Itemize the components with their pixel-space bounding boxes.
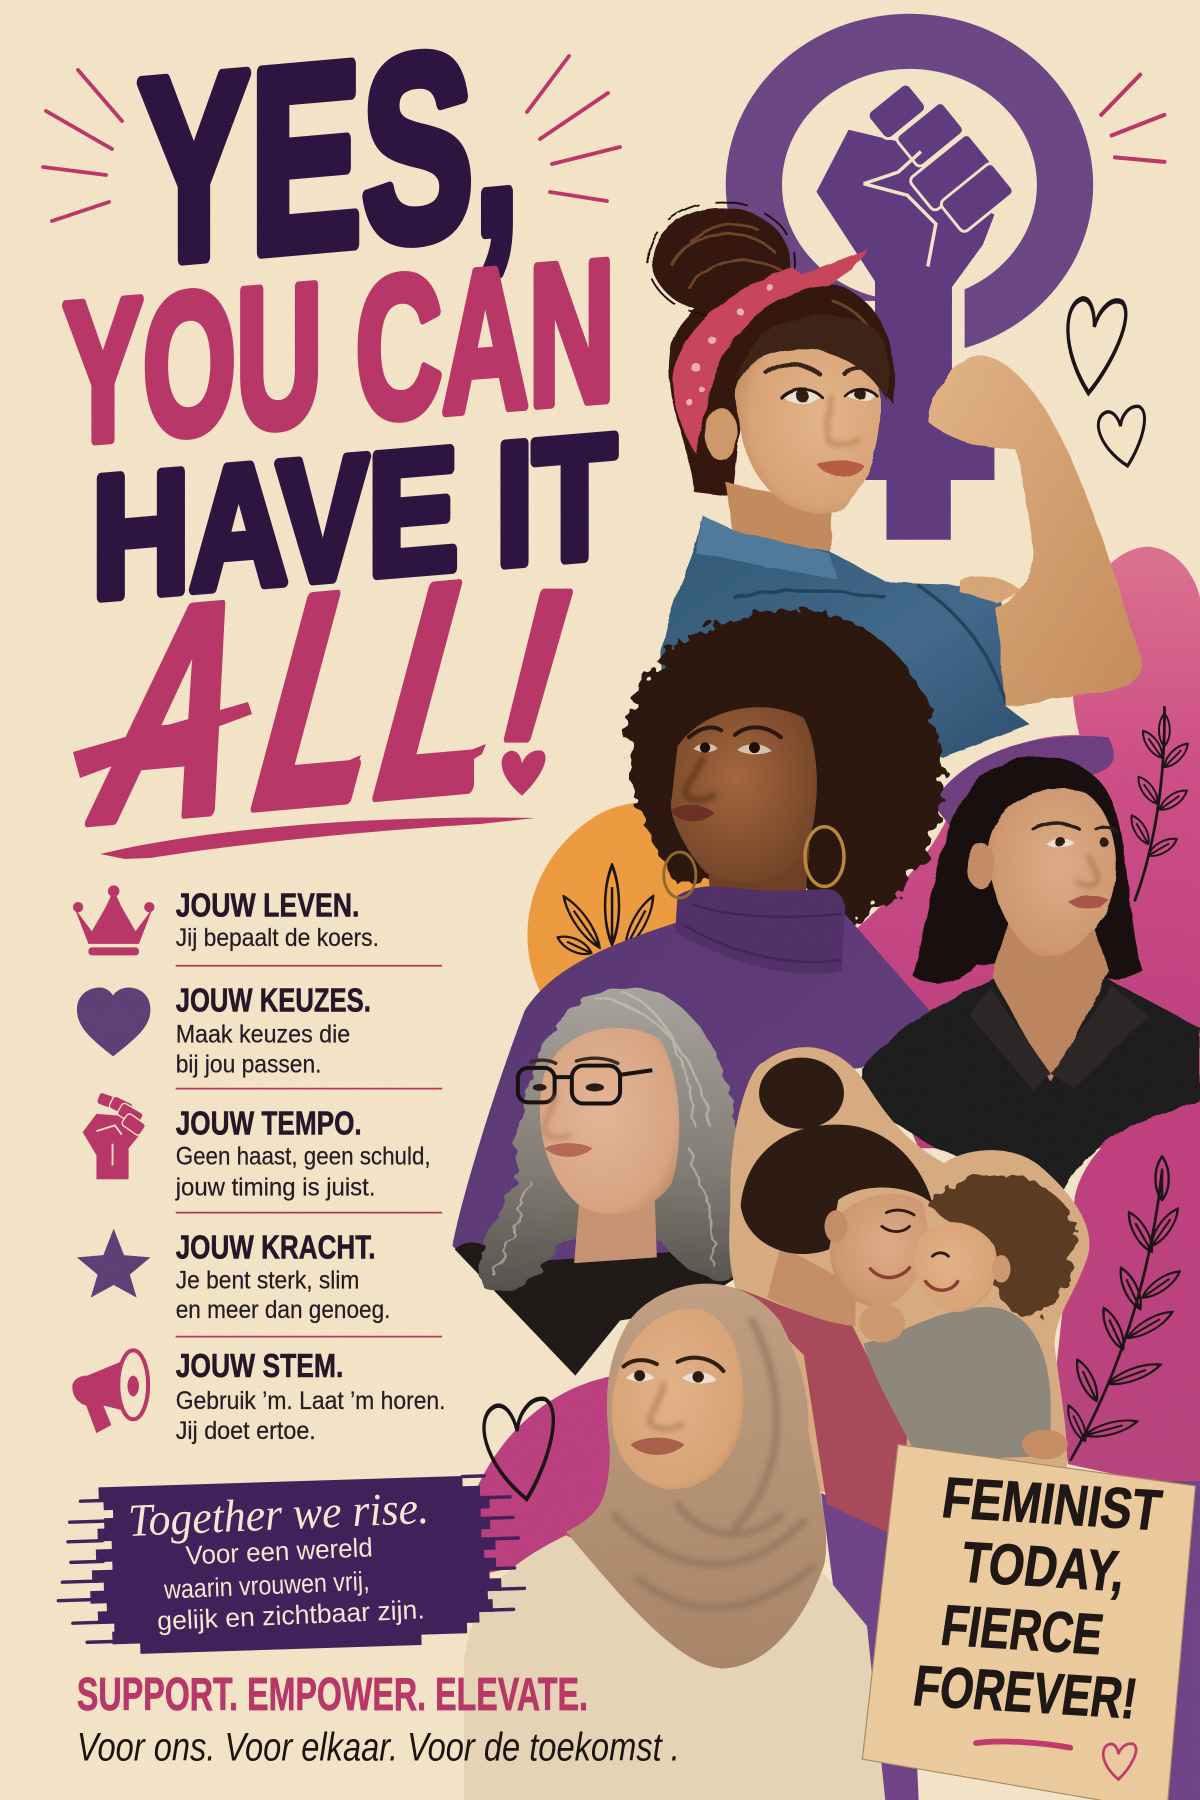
title line: HAVE IT: HAVE IT [92, 398, 616, 635]
panel text two: waarin vrouwen vrij, [163, 1566, 370, 1605]
description line two: bij jou passen. [176, 1051, 322, 1079]
row: jouw keuzes [77, 983, 371, 1079]
pink stroke on sign [976, 1742, 1070, 1748]
protest sign [862, 1445, 1195, 1800]
description line two: jouw timing is juist. [175, 1173, 375, 1201]
black shirt [861, 976, 1200, 1194]
heading: JOUW KEUZES. [176, 983, 371, 1020]
neck [574, 1194, 657, 1263]
brush underline [100, 817, 535, 859]
sign board [862, 1445, 1195, 1800]
icon: heart [77, 988, 150, 1056]
black top [455, 1242, 741, 1376]
purple patch bottom centre [821, 1493, 919, 1800]
face [612, 1308, 744, 1490]
facial features [767, 365, 878, 476]
child's curly hair [928, 1177, 1075, 1318]
pink blob right [833, 547, 1200, 1148]
patch over exclamation dot [474, 750, 526, 810]
turtleneck collar [675, 886, 845, 974]
row: jouw tempo [83, 1092, 431, 1201]
title sparks [43, 56, 620, 221]
title line: ALL: ! [453, 529, 604, 864]
person: grey-haired woman with glasses [455, 984, 747, 1376]
hoop earring [805, 827, 844, 886]
denim shirt [661, 516, 1030, 758]
small hoop earring [664, 852, 696, 898]
person: dark-haired woman in black shirt [861, 756, 1200, 1194]
hair and bun [648, 202, 895, 496]
cream sweater [464, 1535, 885, 1800]
person: woman with bandana flexing [648, 202, 1141, 758]
mother's rose sweater [736, 1288, 907, 1539]
facial features [531, 1058, 618, 1157]
doodle: sprig upper right [1127, 706, 1192, 901]
mother's face [830, 1194, 932, 1307]
mother's hair and bun [741, 1058, 932, 1254]
red bandana [673, 249, 868, 454]
child's ear [992, 1255, 1011, 1283]
tan cutout [729, 1047, 1089, 1493]
glasses [518, 1066, 652, 1104]
ear [705, 408, 737, 460]
heading: JOUW KRACHT. [176, 1230, 375, 1267]
mother's neck [767, 1246, 855, 1326]
face [540, 1028, 679, 1214]
pink heart on sign [1103, 1744, 1136, 1779]
icon: crown [73, 885, 154, 955]
child's face [914, 1222, 997, 1312]
mother's ear [824, 1210, 847, 1242]
artwork collage [452, 14, 1200, 1800]
rolled sleeve [735, 586, 1006, 703]
person: mother and child cutout [729, 1047, 1089, 1539]
long grey hair [480, 984, 747, 1294]
shirt collar [696, 516, 838, 580]
purple patch right edge [1160, 1481, 1200, 1800]
panel text: Voor een wereld [185, 1532, 373, 1570]
brush panel: together we rise [55, 1475, 526, 1650]
title line: ALL: ALL [67, 513, 549, 887]
neck [726, 482, 833, 557]
hand behind elbow [959, 576, 1022, 603]
shirt collar [970, 985, 1148, 1091]
doodle: heart lower left [481, 1397, 564, 1504]
doodle: leaves on orange blob [555, 865, 668, 959]
heading: JOUW TEMPO. [176, 1106, 362, 1143]
title line: YOU CAN: YOU CAN [63, 219, 615, 486]
flexed arm [929, 355, 1141, 706]
row: jouw stem [72, 1348, 446, 1445]
sign text [909, 1465, 1165, 1732]
magenta blob lower left [466, 1376, 643, 1573]
ear [967, 843, 994, 889]
icon: fist [83, 1092, 147, 1179]
hands [859, 1303, 905, 1342]
doodle: small heart upper right [1096, 405, 1152, 470]
closing handwritten line: Voor ons. Voor elkaar. Voor de toekomst . [77, 1724, 680, 1769]
icon: star [77, 1229, 150, 1298]
description: Gebruik ’m. Laat ’m horen. [176, 1387, 446, 1415]
purple sweater [452, 913, 942, 1275]
child's grey sweater [864, 1307, 1051, 1461]
icon: megaphone [72, 1350, 148, 1433]
panel text three: gelijk en zichtbaar zijn. [157, 1594, 425, 1636]
hijab scarf [566, 1284, 826, 1668]
description: Geen haast, geen schuld, [176, 1142, 431, 1170]
hair over forehead [735, 315, 890, 400]
mother's hand [1022, 1430, 1068, 1459]
row: jouw kracht [77, 1229, 390, 1324]
description line two: Jij doet ertoe. [176, 1417, 316, 1445]
sign text: TODAY, [957, 1531, 1129, 1604]
heart replacing exclamation dot [502, 750, 546, 796]
purple arc behind dark-haired woman [932, 736, 1114, 844]
facial features [624, 1358, 723, 1455]
brush tails on letters [73, 702, 486, 800]
facial features [671, 727, 781, 821]
title [63, 0, 616, 887]
afro hair [626, 609, 942, 922]
face [671, 707, 817, 882]
sign text: FIERCE [937, 1594, 1107, 1667]
magenta blob lower right [1056, 1099, 1200, 1493]
list of statements [55, 885, 680, 1769]
description: Jij bepaalt de koers. [176, 924, 379, 952]
row: jouw leven [73, 885, 379, 955]
sparks beside venus [1101, 75, 1164, 162]
slogan: support empower elevate: SUPPORT. EMPOWER. ELEVATE. [77, 1668, 588, 1720]
description: Maak keuzes die [176, 1021, 350, 1049]
person: woman in hijab [464, 1284, 885, 1800]
heading: JOUW LEVEN. [176, 887, 359, 924]
hair [913, 756, 1143, 984]
grey hair strands [494, 990, 713, 1275]
doodle: heart upper right [1062, 297, 1127, 396]
heading: JOUW STEM. [176, 1348, 343, 1385]
child's features [926, 1253, 958, 1290]
facial features [1033, 823, 1116, 909]
doodle: sprig lower right [1064, 1157, 1183, 1461]
brush stroke [55, 1475, 526, 1650]
description: Je bent sterk, slim [176, 1266, 359, 1294]
neck [706, 844, 810, 919]
mother's features [870, 1210, 914, 1278]
person: woman with afro and turtleneck [452, 609, 942, 1275]
description line two: en meer dan genoeg. [176, 1296, 390, 1324]
face [988, 789, 1116, 957]
neck [992, 919, 1109, 1082]
icon: venus symbol with raised fist [726, 14, 1093, 540]
face [735, 333, 881, 514]
scarf fold shadow [614, 1321, 813, 1608]
script slogan: Together we rise. [127, 1482, 430, 1546]
orange blob [527, 802, 718, 1013]
